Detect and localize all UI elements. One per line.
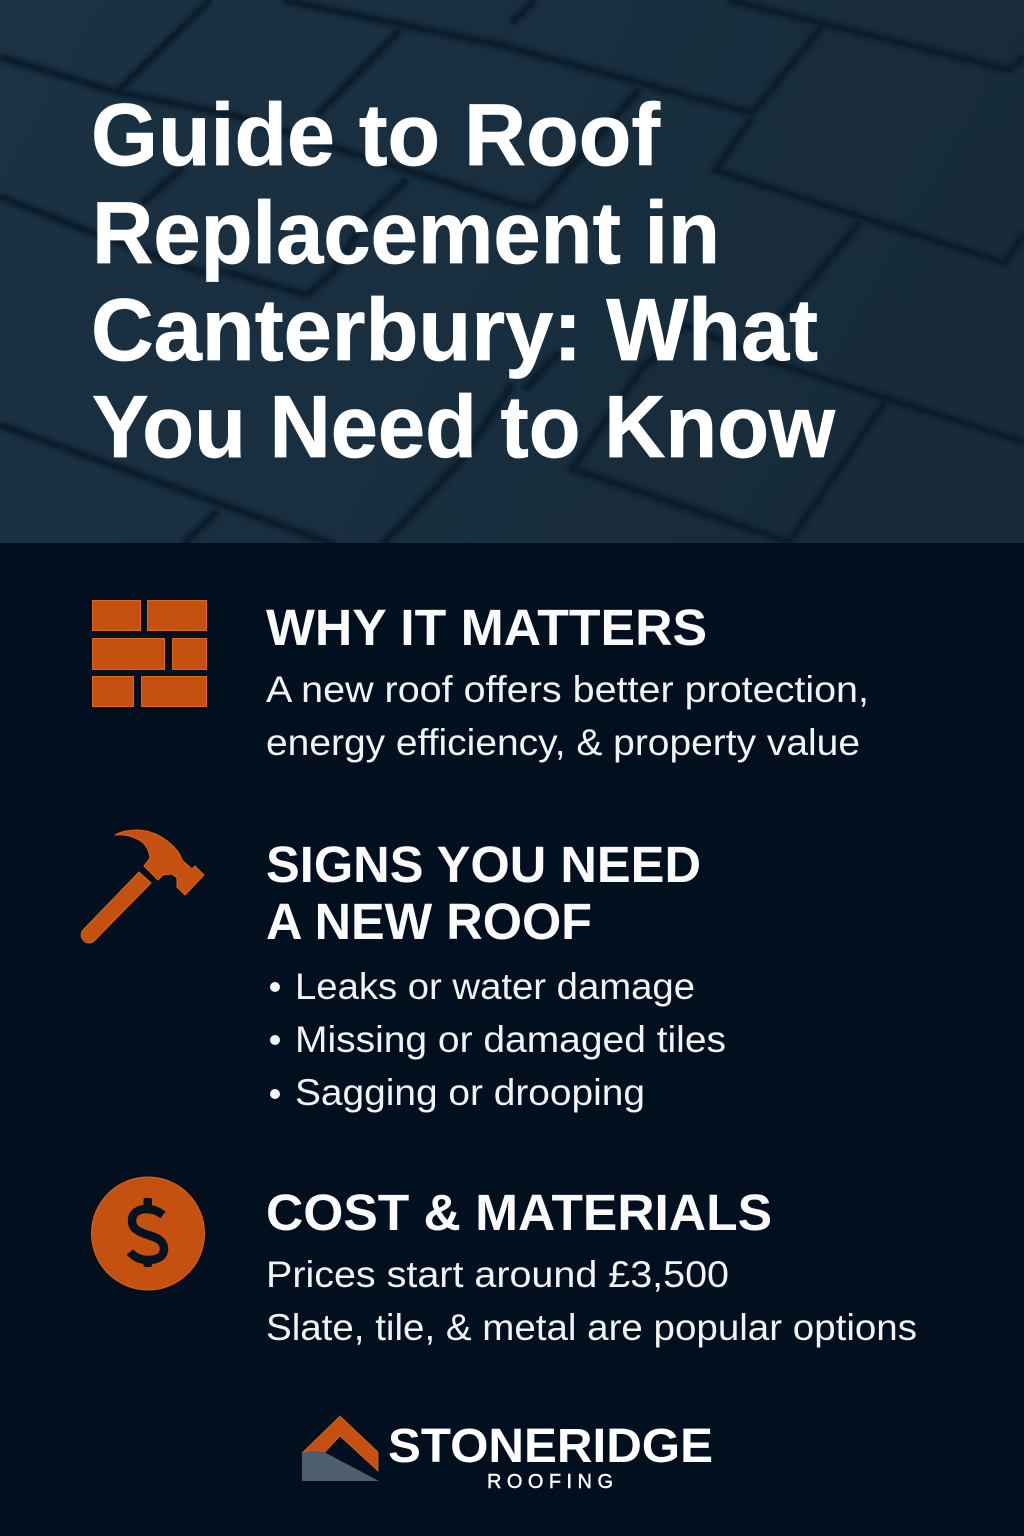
title: You Need to Know [92,377,836,476]
title: Replacement in [92,183,720,282]
title [91,85,836,476]
icon: dollar coin [92,1177,204,1290]
heading: why it matters: WHY IT MATTERS [266,599,707,656]
text: cost and materials body: Slate, tile, & metal are popular options [266,1307,917,1348]
list: signs [270,966,726,1113]
text: cost and materials body [266,1254,917,1348]
heading: signs you need a new roof [266,836,701,950]
text: why it matters body: energy efficiency, & property value [266,722,860,763]
list: signs: Leaks or water damage [295,966,695,1007]
heading: cost and materials: COST & MATERIALS [266,1184,772,1241]
section: why it matters [92,599,869,763]
list: signs: Missing or damaged tiles [295,1019,726,1060]
hero: slate roof background [0,0,1024,544]
text: why it matters body: A new roof offers better protection, [266,669,869,710]
wordmark: STONERIDGE [388,1420,713,1473]
icon: hammer [81,830,204,943]
icon: bricks [92,600,206,706]
logo: Stoneridge Roofing [302,1416,713,1493]
tagline: ROOFING [487,1471,613,1493]
title: Canterbury: What [91,280,818,379]
list: signs: Sagging or drooping [295,1072,645,1113]
section: signs you need a new roof [81,830,726,1113]
text: why it matters body [266,669,869,763]
heading: signs you need a new roof: SIGNS YOU NEED [266,836,701,893]
title: Guide to Roof [91,85,661,184]
text: cost and materials body: Prices start around £3,500 [266,1254,729,1295]
icon: roof mark [302,1416,379,1481]
heading: signs you need a new roof: A NEW ROOF [266,893,592,950]
section: cost and materials [92,1177,917,1348]
